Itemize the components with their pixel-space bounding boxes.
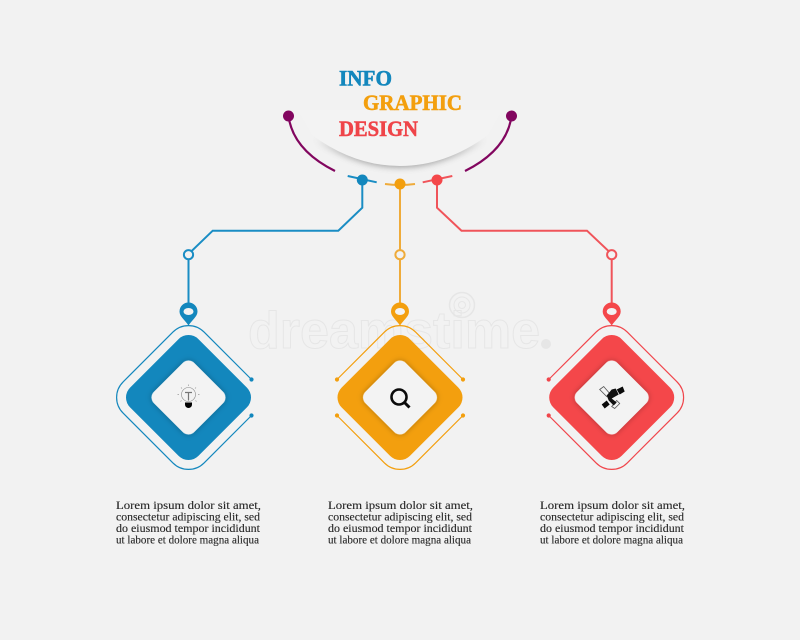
text block: left: consectetur adipiscing elit, sed xyxy=(116,512,260,524)
orange connector xyxy=(385,178,415,304)
header bowl shape xyxy=(298,110,502,167)
purple arc left xyxy=(283,110,335,171)
text block: left: ut labore et dolore magna aliqua xyxy=(116,534,259,546)
icon: light bulb xyxy=(178,384,200,408)
text block: center: Lorem ipsum dolor sit amet, xyxy=(328,500,473,512)
text block: left xyxy=(116,500,261,546)
title word: DESIGN: DESIGN xyxy=(339,116,418,141)
watermark: dreamstime xyxy=(248,302,540,360)
red pin xyxy=(603,302,621,326)
icon: handshake xyxy=(600,386,625,408)
orange outline xyxy=(336,326,464,469)
red module xyxy=(543,302,684,469)
text block: right: Lorem ipsum dolor sit amet, xyxy=(540,500,685,512)
orange pin xyxy=(391,302,409,326)
text block: left: Lorem ipsum dolor sit amet, xyxy=(116,500,261,512)
orange diamond xyxy=(332,329,468,466)
text block: center: consectetur adipiscing elit, sed xyxy=(328,512,472,524)
orange module xyxy=(332,302,468,469)
title word: GRAPHIC: GRAPHIC xyxy=(363,90,462,115)
blue outline xyxy=(117,326,253,469)
text block: right: ut labore et dolore magna aliqua xyxy=(540,534,683,546)
red inner panel xyxy=(571,357,652,438)
text block: right: consectetur adipiscing elit, sed xyxy=(540,512,684,524)
text block: right: do eiusmod tempor incididunt xyxy=(540,523,685,535)
text block: center: ut labore et dolore magna aliqua xyxy=(328,534,471,546)
text block: center xyxy=(328,500,473,546)
text block: center: do eiusmod tempor incididunt xyxy=(328,523,473,535)
icon: magnifier xyxy=(392,390,410,408)
title xyxy=(339,66,462,141)
orange inner panel xyxy=(360,357,440,438)
red connector xyxy=(423,174,616,304)
text block: left: do eiusmod tempor incididunt xyxy=(116,523,261,535)
blue module xyxy=(117,302,257,469)
blue inner panel xyxy=(148,357,229,438)
blue pin xyxy=(180,302,198,326)
red diamond xyxy=(543,329,680,466)
purple arc right xyxy=(465,110,517,171)
blue diamond xyxy=(120,329,257,466)
blue connector xyxy=(184,174,377,304)
text block: right xyxy=(540,500,685,546)
title word: INFO: INFO xyxy=(339,66,392,90)
red outline xyxy=(547,326,684,469)
